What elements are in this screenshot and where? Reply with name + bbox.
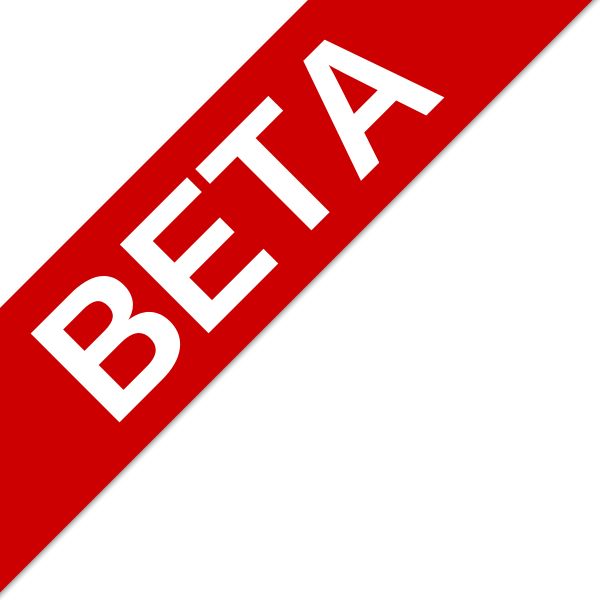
white area above the ribbon xyxy=(0,0,308,308)
